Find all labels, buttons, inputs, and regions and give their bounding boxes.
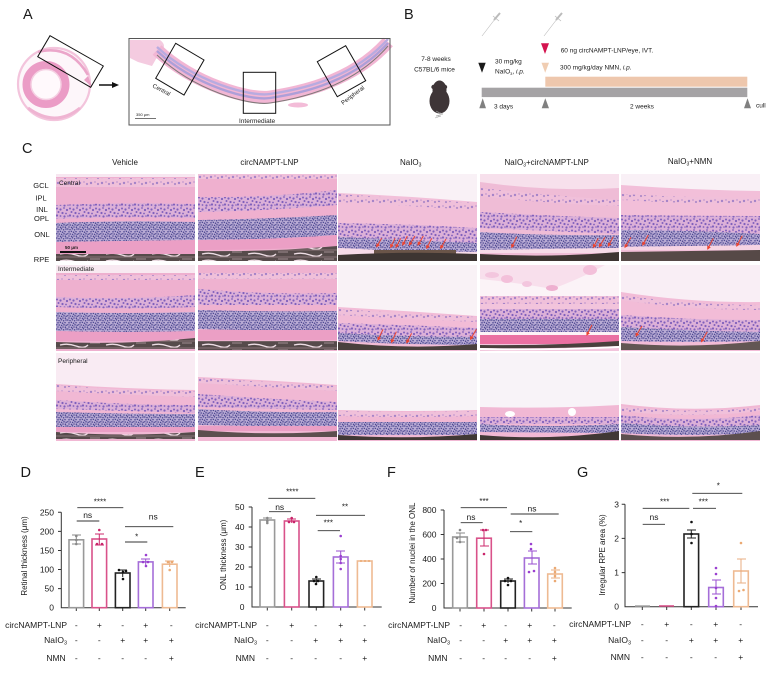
tick labels: 30 [235, 542, 245, 552]
tick labels [40, 507, 54, 613]
heading: F: F [387, 465, 396, 481]
chart D: retinal thickness: ns [149, 512, 158, 522]
layer labels: OPL [34, 214, 49, 223]
histology: central vehicle [56, 174, 195, 261]
chart E: ONL thickness [195, 465, 382, 663]
treatment table [388, 620, 557, 663]
scale bar: 350 μm [136, 112, 150, 117]
chart E: ONL thickness: *** [324, 518, 333, 528]
marker: circNAMPT-LNP [541, 43, 549, 54]
chart E: ONL thickness: ns [275, 502, 284, 512]
panel C: histology grid [22, 141, 760, 441]
tick labels: 0 [432, 603, 437, 613]
chart G: irregular RPE area: * [717, 482, 720, 490]
region labels and scale: Central [59, 180, 81, 187]
region labels and scale [58, 180, 95, 365]
panel B: treatment timeline [404, 7, 766, 118]
significance brackets [268, 498, 365, 531]
axis title: Retinal thickness (μm) [20, 516, 29, 596]
NMN treatment bar [545, 77, 747, 87]
tick labels: 50 [45, 584, 54, 594]
chart G: irregular RPE area [569, 465, 758, 662]
treatment table: NaIO [427, 635, 447, 645]
column headers: 3 [523, 162, 526, 168]
region labels and scale: Intermediate [58, 266, 95, 273]
timeline labels: 3 days [494, 103, 514, 110]
heading: B: B [404, 7, 414, 23]
histology: central NaIO3+NMN [621, 174, 760, 261]
axis title: Irregular RPE area (%) [598, 514, 607, 596]
tick labels [614, 499, 619, 612]
tick labels [422, 505, 437, 613]
column headers: NaIO [400, 158, 419, 167]
mouse strain label: 7-8 weeks [421, 56, 452, 63]
tick labels: 100 [40, 564, 54, 574]
treatment table: --+++ [641, 635, 743, 645]
heading: A: A [23, 7, 33, 23]
axis title: ONL thickness (μm) [219, 519, 228, 590]
icon: syringe 2 [544, 13, 562, 36]
treatment table: --+++ [459, 635, 557, 645]
bars [635, 534, 748, 607]
treatment table: -+-+- [75, 620, 173, 630]
histology: central NaIO3 [338, 174, 477, 261]
tick labels: 1 [614, 568, 619, 578]
red arrows [377, 235, 742, 343]
column headers [112, 157, 712, 168]
treatment table: NaIO [608, 635, 628, 645]
region boxes [156, 43, 366, 113]
text: NaIO3 dose: i.p. [516, 68, 525, 76]
chart F: nuclei in ONL: * [519, 519, 522, 528]
axes and ticks [249, 507, 382, 610]
layer labels: ONL [34, 230, 50, 239]
tick labels: 20 [235, 562, 245, 572]
histology: intermediate vehicle [56, 265, 195, 351]
label: Central: Central [151, 83, 171, 98]
column headers: circNAMPT-LNP [240, 158, 299, 167]
treatment table: -+-+- [459, 620, 556, 630]
bars [260, 520, 372, 607]
treatment table: ----+ [459, 653, 557, 663]
treatment table: ----+ [75, 653, 174, 663]
tick labels: 250 [40, 507, 54, 517]
tick labels: 50 [235, 502, 245, 512]
histology: peripheral NaIO3+circNAMPT-LNP [480, 353, 619, 441]
heading: D: D [20, 465, 31, 481]
column headers: NaIO [668, 157, 686, 166]
panel A: retina overview [18, 7, 390, 125]
treatment table: -+-+- [266, 620, 366, 630]
histology: intermediate circNAMPT-LNP [198, 265, 337, 351]
column headers: NaIO [505, 158, 523, 167]
histology: peripheral circNAMPT-LNP [198, 353, 337, 441]
layer labels: GCL [33, 181, 49, 190]
treatment table: circNAMPT-LNP [388, 620, 450, 630]
tick labels: 800 [422, 505, 437, 515]
tick labels: 40 [235, 522, 245, 532]
marker: NMN [542, 63, 549, 73]
timeline labels: 2 weeks [630, 103, 655, 110]
timeline labels: cull [756, 102, 766, 110]
histology: intermediate NaIO3+NMN [621, 265, 760, 351]
tick labels: 0 [49, 603, 54, 613]
timeline markers [479, 98, 751, 108]
tick labels [235, 502, 245, 612]
treatment table [195, 620, 367, 663]
arrow [99, 82, 119, 88]
treatment table: --+++ [266, 635, 367, 645]
column headers: Vehicle [112, 158, 138, 167]
treatment table: circNAMPT-LNP [195, 620, 257, 630]
axes and ticks [441, 510, 572, 612]
column headers: +NMN [689, 157, 712, 166]
histology: central NaIO3+circNAMPT-LNP [480, 174, 619, 261]
selection box on eye [38, 36, 103, 87]
histology: intermediate NaIO3+circNAMPT-LNP [480, 265, 619, 351]
histology: central circNAMPT-LNP [198, 174, 337, 261]
axes and ticks [58, 512, 186, 611]
text: NaIO3 dose: 3 [510, 71, 513, 76]
chart D: retinal thickness: **** [94, 498, 106, 506]
treatment table: -+-+- [641, 619, 742, 629]
region labels and scale: 50 μm [65, 245, 78, 250]
treatment table: NMN [428, 653, 448, 663]
text: NaIO3 dose: 30 mg/kg [495, 58, 522, 66]
heading: G: G [577, 465, 588, 481]
error bars and points [687, 530, 746, 594]
significance brackets [461, 508, 559, 532]
mouse strain label [414, 56, 455, 74]
treatment table: 3 [64, 640, 67, 646]
chart D: retinal thickness: * [135, 532, 138, 542]
treatment table: NMN [46, 653, 66, 663]
chart F: nuclei in ONL: ns [528, 504, 536, 514]
column headers: 3 [686, 162, 690, 168]
scale bar [135, 112, 156, 118]
treatment table: circNAMPT-LNP [5, 620, 67, 630]
timeline labels [494, 102, 766, 110]
tick labels: 3 [614, 499, 619, 509]
treatment table: NaIO [234, 635, 254, 645]
histology: peripheral NaIO3 [338, 353, 477, 441]
icon: mouse [430, 80, 450, 118]
chart F: nuclei in ONL: ns [467, 512, 475, 522]
icon: syringe 1 [482, 13, 500, 36]
tick labels: 200 [40, 526, 54, 536]
tick labels: 10 [235, 582, 245, 592]
significance brackets [77, 508, 173, 542]
timeline bar [482, 88, 747, 97]
heading: E: E [195, 465, 205, 481]
histology: peripheral NaIO3+NMN [621, 353, 760, 441]
retina strip box [129, 38, 390, 125]
treatment table: circNAMPT-LNP [569, 619, 631, 629]
chart G: irregular RPE area: ns [650, 512, 658, 522]
mouse strain label: C57BL/6 mice [414, 66, 455, 74]
tick labels: 400 [422, 554, 437, 564]
tick labels: 600 [422, 530, 437, 540]
layer labels: RPE [34, 255, 49, 264]
text: circNAMPT-LNP dose: 60 ng circNAMPT-LNP/eye, IVT. [561, 47, 653, 54]
histology: peripheral vehicle [56, 353, 195, 441]
text: NaIO3 dose: NaIO [495, 68, 510, 76]
label: Peripheral: Peripheral [341, 85, 366, 107]
tick labels: 150 [40, 546, 54, 556]
tick labels: 200 [422, 578, 437, 588]
chart D: retinal thickness [5, 465, 186, 663]
chart F: nuclei in ONL: *** [479, 497, 489, 506]
error bars and points [456, 530, 560, 583]
axis title: Number of nuclei in the ONL [408, 502, 417, 603]
chart G: irregular RPE area: *** [699, 498, 708, 506]
bars [69, 539, 177, 608]
treatment table: 3 [254, 640, 257, 646]
heading: C: C [22, 141, 32, 157]
histology: intermediate NaIO3 [338, 265, 477, 351]
label: Intermediate: Intermediate [239, 118, 276, 125]
layer labels: IPL [35, 194, 47, 202]
tick labels: 0 [614, 602, 619, 612]
treatment table: --+++ [75, 635, 174, 645]
layer labels [33, 181, 50, 264]
bars [453, 537, 562, 608]
layer labels: INL [36, 205, 48, 214]
tick labels: 0 [240, 602, 245, 612]
error bars and points [263, 518, 345, 584]
text: NMN dose: 300 mg/kg/day NMN, i.p. [560, 64, 632, 71]
region labels and scale: Peripheral [58, 358, 88, 365]
treatment table: NMN [236, 653, 255, 663]
treatment table: NaIO [44, 635, 64, 645]
significance brackets [643, 493, 742, 524]
text: NaIO3 dose: , [512, 68, 516, 76]
column headers: 3 [419, 162, 422, 168]
chart F: nuclei in ONL [387, 465, 572, 663]
chart G: irregular RPE area: *** [660, 498, 669, 506]
treatment table: NMN [611, 652, 630, 662]
column headers: +circNAMPT-LNP [526, 158, 589, 167]
tick labels: 2 [614, 533, 619, 543]
marker: NaIO3 [478, 63, 486, 73]
treatment table: 3 [447, 640, 450, 646]
treatment table: ----+ [641, 652, 743, 662]
chart E: ONL thickness: ** [342, 502, 348, 512]
treatment table: 3 [628, 640, 631, 646]
treatment table [5, 620, 174, 663]
chart E: ONL thickness: **** [286, 488, 299, 496]
treatment table: ----+ [266, 653, 367, 663]
histology micrographs [56, 174, 760, 441]
chart D: retinal thickness: ns [83, 510, 92, 520]
eye cross-section [18, 48, 92, 120]
error bars and points [72, 534, 174, 577]
axes and ticks [622, 504, 758, 610]
treatment table [569, 619, 743, 662]
